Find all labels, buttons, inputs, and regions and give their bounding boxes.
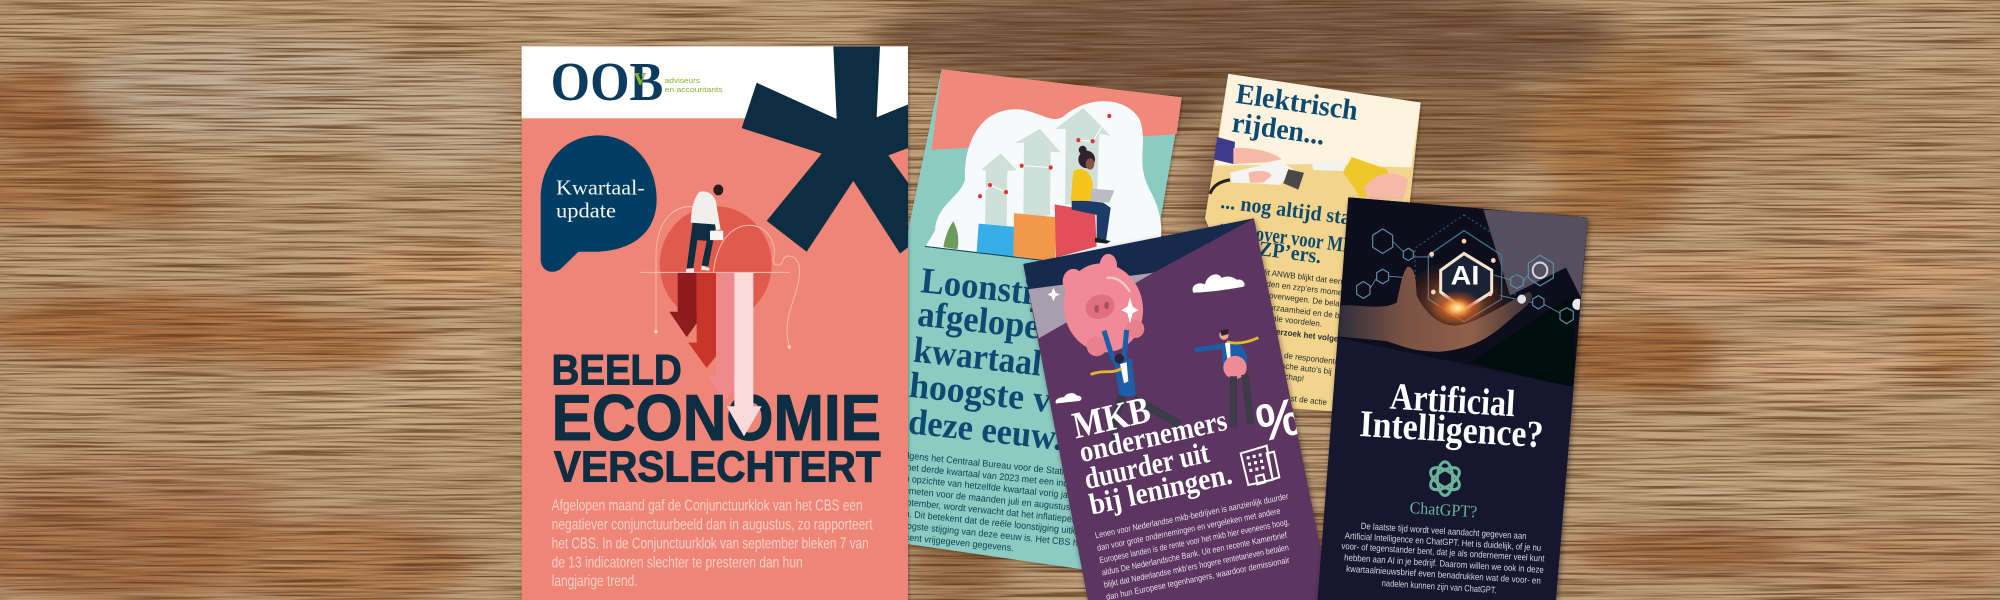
heading: Elektrisch rijden: Elektrisch [1234,78,1360,127]
body text: cover intro: langjarige trend. [552,574,638,590]
body text: cover intro: Afgelopen maand gaf de Conjunctuurklok van het CBS een [552,498,863,515]
body text: Artificial Intelligence: nadelen kunnen zijn van ChatGPT. [1382,578,1497,595]
body text: Elektrisch rijden: Onderzoek het volgende [1260,325,1353,346]
illustration: piggy bank lifted by man [1047,251,1180,446]
document: Beeld economie verslechtert cover [522,46,908,600]
callout: Kwartaal-update bubble: update [556,200,616,223]
body text: cover intro [552,498,873,590]
body text: Elektrisch rijden: rijden en zzp’ers momenteel gebruik [1260,279,1389,303]
heading: Artificial Intelligence [1359,375,1545,456]
body text: cover intro: het CBS. In de Conjunctuurklok van september bleken 7 van [552,536,869,553]
body text: Loonstijging: in het derde kwartaal van 2023 met een indrukwekkende toename [896,461,1159,498]
flyer sheet [1317,197,1588,600]
cover sheet [522,46,908,600]
icon: clouds [1056,274,1245,404]
illustration: falling arrows [669,273,743,401]
body text: MKB ondernemers: Europese landen is de rente voor het mkb hier eveneens hoog, [1099,516,1290,565]
photo: AI hologram over hand [1338,197,1588,387]
body text: MKB ondernemers: aldus De Nederlandsche Bank. Uit een recente Kamerbrief [1101,530,1288,578]
subheading: nog altijd [1217,191,1369,268]
document: MKB ondernemers flyer [1023,218,1333,600]
body text: Loonstijging: Gemeten voor de maanden juli en augustus, evenals een [896,485,1124,518]
document: Loonstijging flyer [880,69,1182,570]
body text: Artificial Intelligence: Artificial Intelligence en ChatGPT. Het is duidelijk, of je nu [1345,530,1542,553]
heading: Loonstijging: kwartaal [912,329,1044,384]
body text: cover intro: de 13 indicatoren slechter te presteren dan hun [552,555,803,571]
body text: Elektrisch rijden: Daarnaast de actie [1260,390,1328,407]
body text: Loonstijging [896,449,1159,554]
heading: beeld economie verslechtert [552,346,881,491]
subheading: ChatGPT: ChatGPT? [1409,498,1478,521]
body text: Loonstijging: september, wordt verwacht dat het inflatiepercentage komt [896,496,1129,530]
illustration: man with broken piggy bank [1195,329,1258,427]
heading: MKB ondernemers: ondernemers [1077,404,1230,469]
heading: beeld economie verslechtert: ECONOMIE [552,382,881,455]
heading: MKB ondernemers: duurder uit [1082,436,1212,496]
photo: AI hologram over hand: AI [1451,260,1479,290]
heading: Loonstijging [907,259,1109,458]
logo: OOB adviseurs en accountants: en accountants [665,87,723,94]
icon: asterisk [742,46,908,254]
body text: Loonstijging: recent vrijgegeven gegevens. [896,531,1014,553]
heading: MKB ondernemers: bij leningen. [1087,458,1235,522]
illustration: man with briefcase [686,184,723,273]
body text: Artificial Intelligence [1341,521,1545,595]
heading: Elektrisch rijden: rijden... [1230,107,1327,152]
heading: Loonstijging: hoogste van [908,364,1091,425]
body text: Elektrisch rijden [1260,267,1389,407]
logo: OOB adviseurs en accountants: OOB [551,52,663,112]
body text: cover intro: negatiever conjunctuurbeeld dan in augustus, zo rapporteert [552,517,873,534]
heading: beeld economie verslechtert: VERSLECHTERT [554,442,881,491]
body text: Loonstijging: ten. Dit betekent dat de reële loonstijging uitkomt op 3,4 [896,508,1118,540]
heading: Loonstijging: deze eeuw. [907,400,1065,458]
body text: Loonstijging: hoogste stijging van deze eeuw is. Het CBS heeft deze info [896,520,1132,554]
illustration: growth arrows and woman on blocks [925,101,1161,262]
body text: MKB ondernemers: Lenen voor Nederlandse mkb-bedrijven is aanzienlijk duurder [1094,491,1289,540]
illustration: red circle and guide lines [640,206,800,349]
body text: Elektrisch rijden: Uit ANWB blijkt dat een derde [1260,267,1366,289]
body text: MKB ondernemers: dan voor grote ondernemingen en vergeleken met andere [1096,505,1281,553]
flyer sheet [880,69,1182,570]
heading: Artificial Intelligence: Intelligence? [1359,402,1545,456]
body text: Elektrisch rijden: te overwegen. De belangrijkste [1260,290,1370,312]
body text: Artificial Intelligence: kwartaalnieuwsbrief even benadrukken wat de voor- en [1346,563,1541,586]
body text: Artificial Intelligence: voor- of tegenstander bent, dat je als ondernemer veel kunt [1341,541,1545,564]
logo: OOB adviseurs en accountants: v [634,63,647,91]
document: Artificial Intelligence flyer [1317,190,1593,600]
heading: beeld economie verslechtert: BEELD [552,346,682,394]
heading: MKB ondernemers: MKB [1069,388,1154,447]
body text: Artificial Intelligence: hebben aan AI in je bedrijf. Daarom willen we ook in deze [1344,552,1544,575]
body text: Elektrisch rijden: onderschap! [1260,369,1304,384]
icon: office building [1241,446,1279,485]
body text: Loonstijging: Volgens het Centraal Bureau voor de Statistiek, zijn de lonen [896,449,1138,484]
illustration: pale arrow through the O [727,273,762,436]
body text: Elektrisch rijden: ... van de respondenten [1260,348,1345,367]
flyer sheet [1023,218,1333,600]
subheading: nog altijd: ZZP’ers. [1244,236,1322,268]
flyer sheet [1205,74,1421,415]
heading: MKB ondernemers [1069,388,1235,522]
body text: Loonstijging: ten opzichte van hetzelfde kwartaal vorig jaar gestegen [896,473,1116,505]
logo: OOB adviseurs en accountants: adviseurs [665,78,701,85]
heading: Artificial Intelligence: Artificial [1389,375,1516,425]
logo: OOB adviseurs en accountants [551,52,723,112]
body text: Elektrisch rijden: fiscale voordelen. [1260,312,1323,329]
subheading: nog altijd: ... nog altijd staat [1219,191,1369,232]
subheading: nog altijd: tegenover voor MKB [1217,218,1368,260]
callout: Kwartaal-update bubble: Kwartaal- [556,177,645,200]
body text: MKB ondernemers [1094,491,1290,600]
icon: percent sign: % [1251,386,1306,453]
icon: ChatGPT logo [1427,462,1463,496]
illustration: electric charger and fuel nozzle [1210,137,1408,199]
body text: Elektrisch rijden: duurzaamheid en de bepaalde [1260,302,1368,324]
callout: Kwartaal-update bubble [541,135,657,272]
body text: MKB ondernemers: blijkt dat Nederlandse mkb’ers hogere rentetarieven betalen [1103,542,1290,590]
heading: Loonstijging: Loonstijging [919,259,1109,321]
heading: Loonstijging: afgelopen [916,293,1061,349]
body text: Elektrisch rijden: elektrische auto’s bij [1260,359,1332,376]
document: Elektrisch rijden flyer [1205,74,1421,415]
body text: Artificial Intelligence: De laatste tijd wordt veel aandacht gegeven aan [1361,521,1527,541]
heading: Elektrisch rijden [1230,78,1360,152]
